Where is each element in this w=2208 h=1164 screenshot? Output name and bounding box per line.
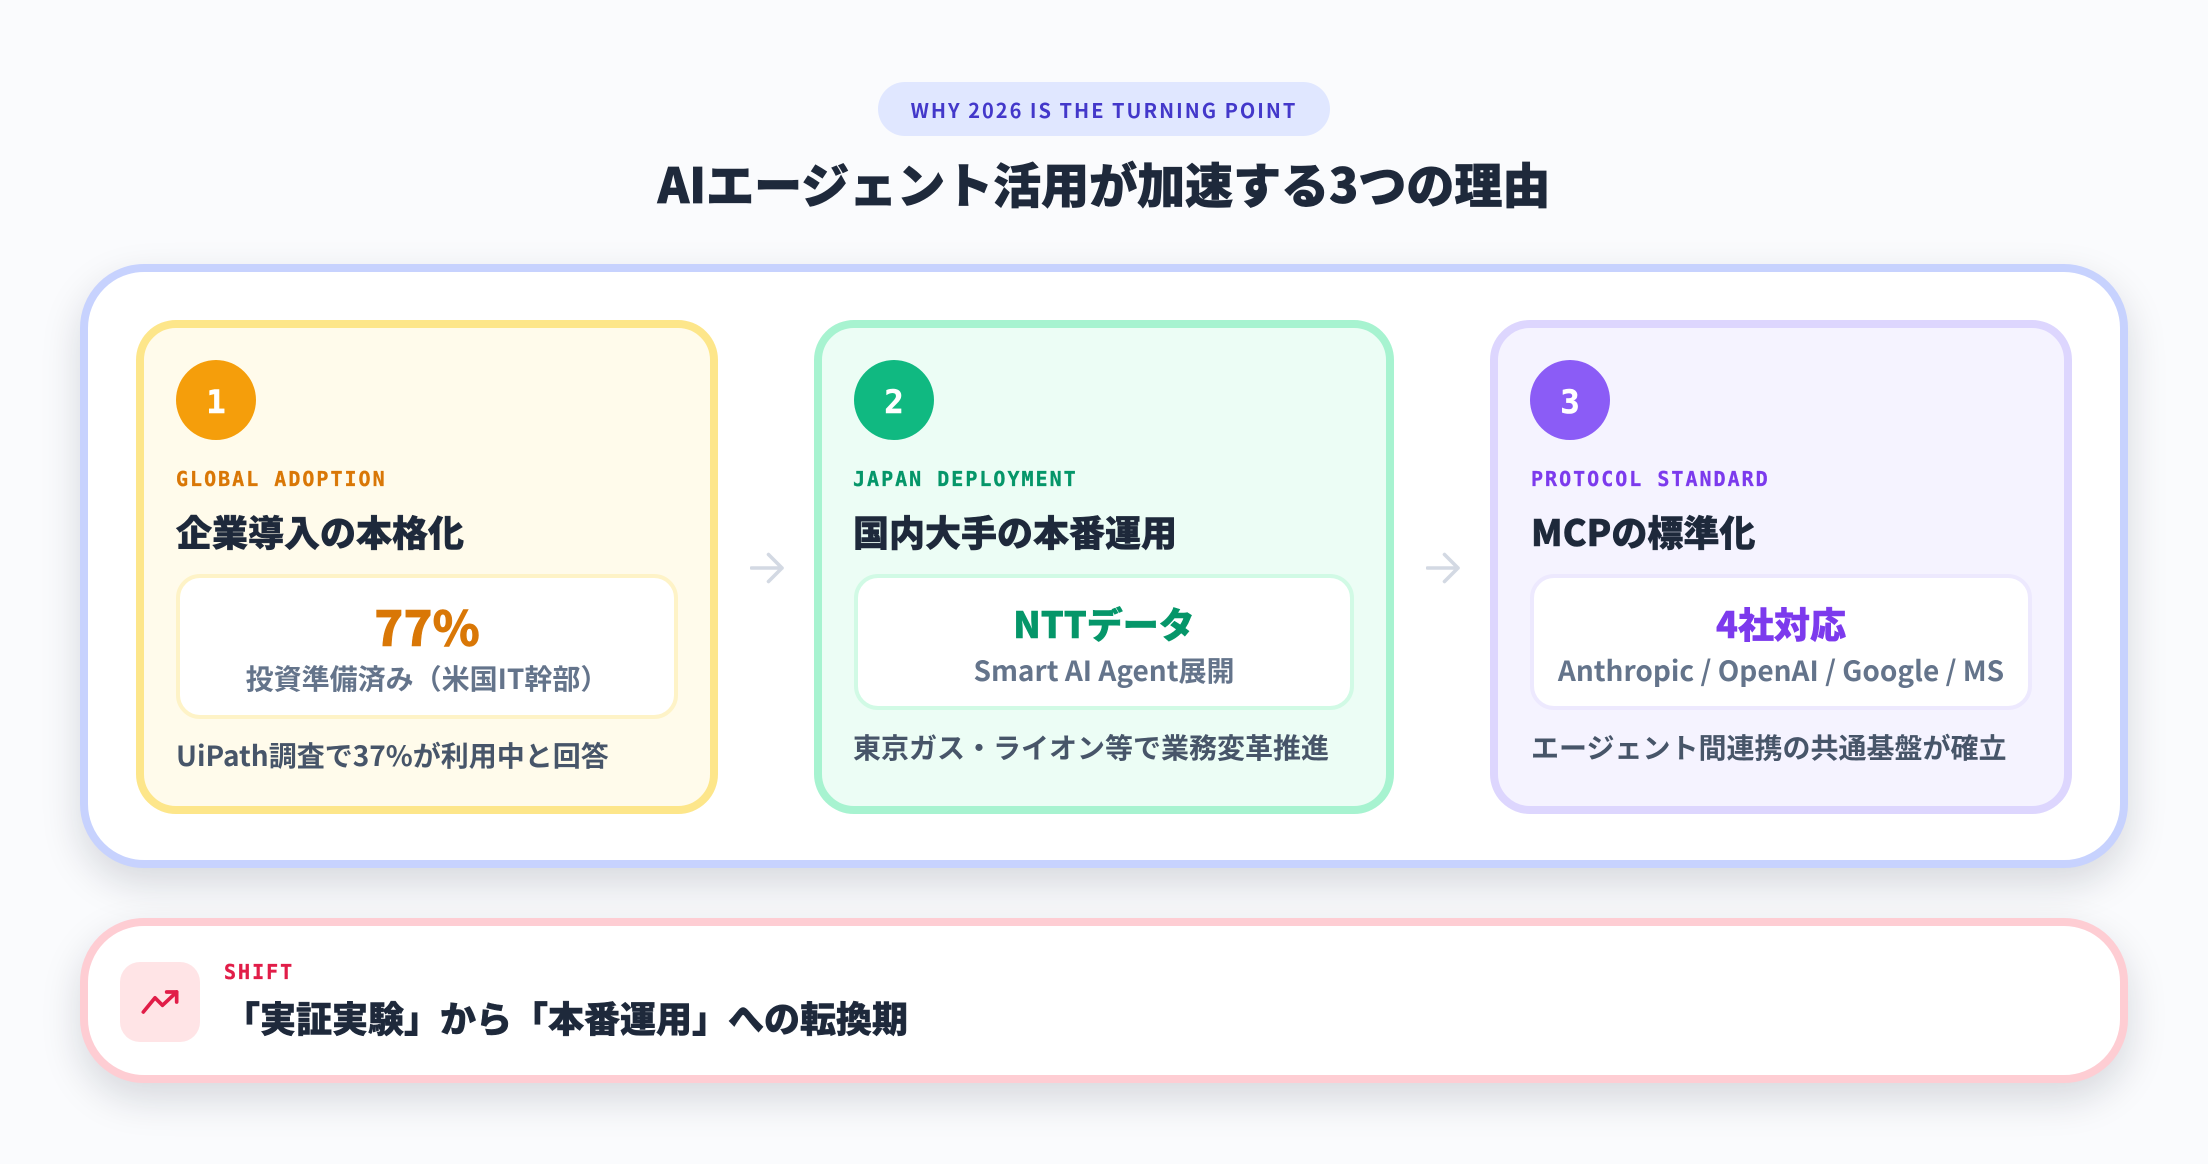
arrow 2 to 3 xyxy=(1426,552,1460,584)
icon: trending up xyxy=(120,962,200,1042)
number 2 xyxy=(854,360,934,440)
arrow 1 to 2 xyxy=(750,552,784,584)
stat caption: 投資準備済み（米国IT幹部） xyxy=(246,658,608,698)
label: protocol standard: PROTOCOL STANDARD xyxy=(1531,467,1770,491)
heading: card 1: 企業導入の本格化 xyxy=(176,505,464,557)
stat value: 4社対応 xyxy=(1716,597,1846,649)
badge: why 2026 xyxy=(878,82,1330,136)
stat value: NTTデータ xyxy=(1013,597,1195,649)
shift message: 「実証実験」から「本番運用」への転換期 xyxy=(224,991,908,1043)
label: shift: SHIFT xyxy=(224,960,294,984)
stat value: 77% xyxy=(374,590,480,660)
description: card 3: エージェント間連携の共通基盤が確立 xyxy=(1531,727,2006,767)
description: card 1: UiPath調査で37%が利用中と回答 xyxy=(176,735,609,775)
stat caption: Smart AI Agent展開 xyxy=(973,650,1235,690)
heading: card 3: MCPの標準化 xyxy=(1531,505,1755,557)
heading: card 2: 国内大手の本番運用 xyxy=(853,505,1177,557)
number 3 xyxy=(1530,360,1610,440)
stat box: 77% xyxy=(176,574,678,719)
stat box: NTT data xyxy=(854,574,1354,710)
badge: why 2026: WHY 2026 IS THE TURNING POINT xyxy=(911,95,1297,124)
title: AIエージェント活用が加速する3つの理由 xyxy=(658,147,1550,217)
stat box: four companies xyxy=(1530,574,2032,710)
card 1: global adoption xyxy=(136,320,718,814)
card 3: protocol standard xyxy=(1490,320,2072,814)
number 1 xyxy=(176,360,256,440)
card 2: japan deployment xyxy=(814,320,1394,814)
label: japan deployment: JAPAN DEPLOYMENT xyxy=(853,467,1078,491)
description: card 2: 東京ガス・ライオン等で業務変革推進 xyxy=(853,727,1329,767)
stat caption: Anthropic / OpenAI / Google / MS xyxy=(1558,650,2004,690)
panel: main reasons xyxy=(80,264,2128,868)
number 3: 3 xyxy=(1560,383,1580,421)
number 1: 1 xyxy=(206,383,226,421)
label: global adoption: GLOBAL ADOPTION xyxy=(176,467,387,491)
number 2: 2 xyxy=(884,383,904,421)
panel: shift banner xyxy=(80,918,2128,1083)
